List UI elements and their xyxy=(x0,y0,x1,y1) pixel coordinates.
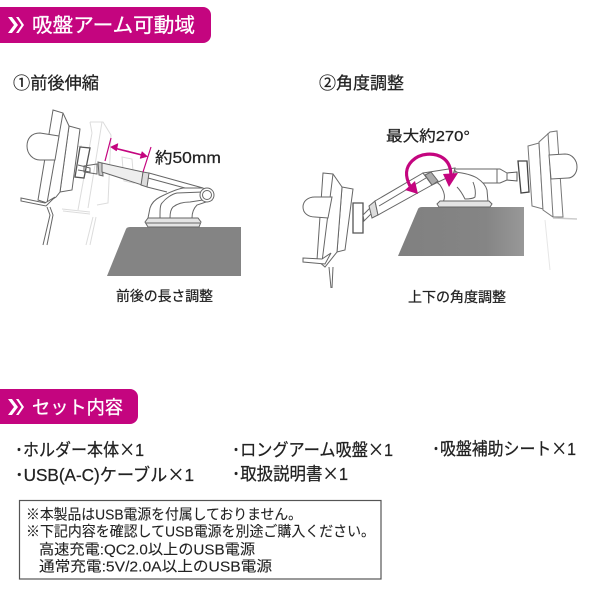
holder xyxy=(21,110,90,245)
tilted arm xyxy=(369,173,432,218)
caption: front-back length adjustment: 前後の長さ調整 xyxy=(116,288,213,304)
diagram: front-back extension xyxy=(21,110,241,276)
table xyxy=(107,227,241,276)
note box: 通常充電:5V/2.0A以上のUSB電源 xyxy=(39,558,273,576)
horizontal arm and suction base xyxy=(423,168,507,207)
label: about 50mm: 約50mm xyxy=(155,149,221,167)
caption: up-down angle adjustment: 上下の角度調整 xyxy=(408,289,506,305)
telescopic arm xyxy=(84,162,203,192)
list: set contents xyxy=(15,436,576,487)
magenta curved double arrow xyxy=(405,154,458,194)
list: set contents: ･USB(A-C)ケーブル×1 xyxy=(15,462,194,487)
suction base xyxy=(145,188,214,227)
heading: set contents xyxy=(0,389,138,424)
heading: set contents: セット内容 xyxy=(32,397,123,418)
list: set contents: ･取扱説明書×1 xyxy=(232,461,348,486)
diagram: angle adjustment xyxy=(303,131,577,288)
table xyxy=(398,207,524,256)
list: set contents: ･ロングアーム吸盤×1 xyxy=(232,437,393,462)
note box: ※下記内容を確認してUSB電源を別途ご購入ください。 xyxy=(26,524,375,540)
left holder xyxy=(303,173,373,288)
note box: 高速充電:QC2.0以上のUSB電源 xyxy=(39,542,256,558)
list: set contents: ･ホルダー本体×1 xyxy=(15,437,144,462)
ghost holder at extended position xyxy=(62,122,134,245)
subheading: 2 angle adjustment: ②角度調整 xyxy=(319,74,404,93)
heading: suction arm range of motion: 吸盤アーム可動域 xyxy=(32,14,195,37)
subheading: 1 front-back extension: ①前後伸縮 xyxy=(13,74,99,93)
note box: ※本製品はUSB電源を付属しておりません。 xyxy=(26,506,302,524)
note box xyxy=(20,500,381,579)
pink dimension marks xyxy=(105,138,151,172)
list: set contents: ･吸盤補助シート×1 xyxy=(432,436,576,461)
heading: suction arm range of motion xyxy=(0,7,211,43)
label: up to about 270 degrees: 最大約270° xyxy=(386,128,470,145)
right holder xyxy=(507,131,577,270)
